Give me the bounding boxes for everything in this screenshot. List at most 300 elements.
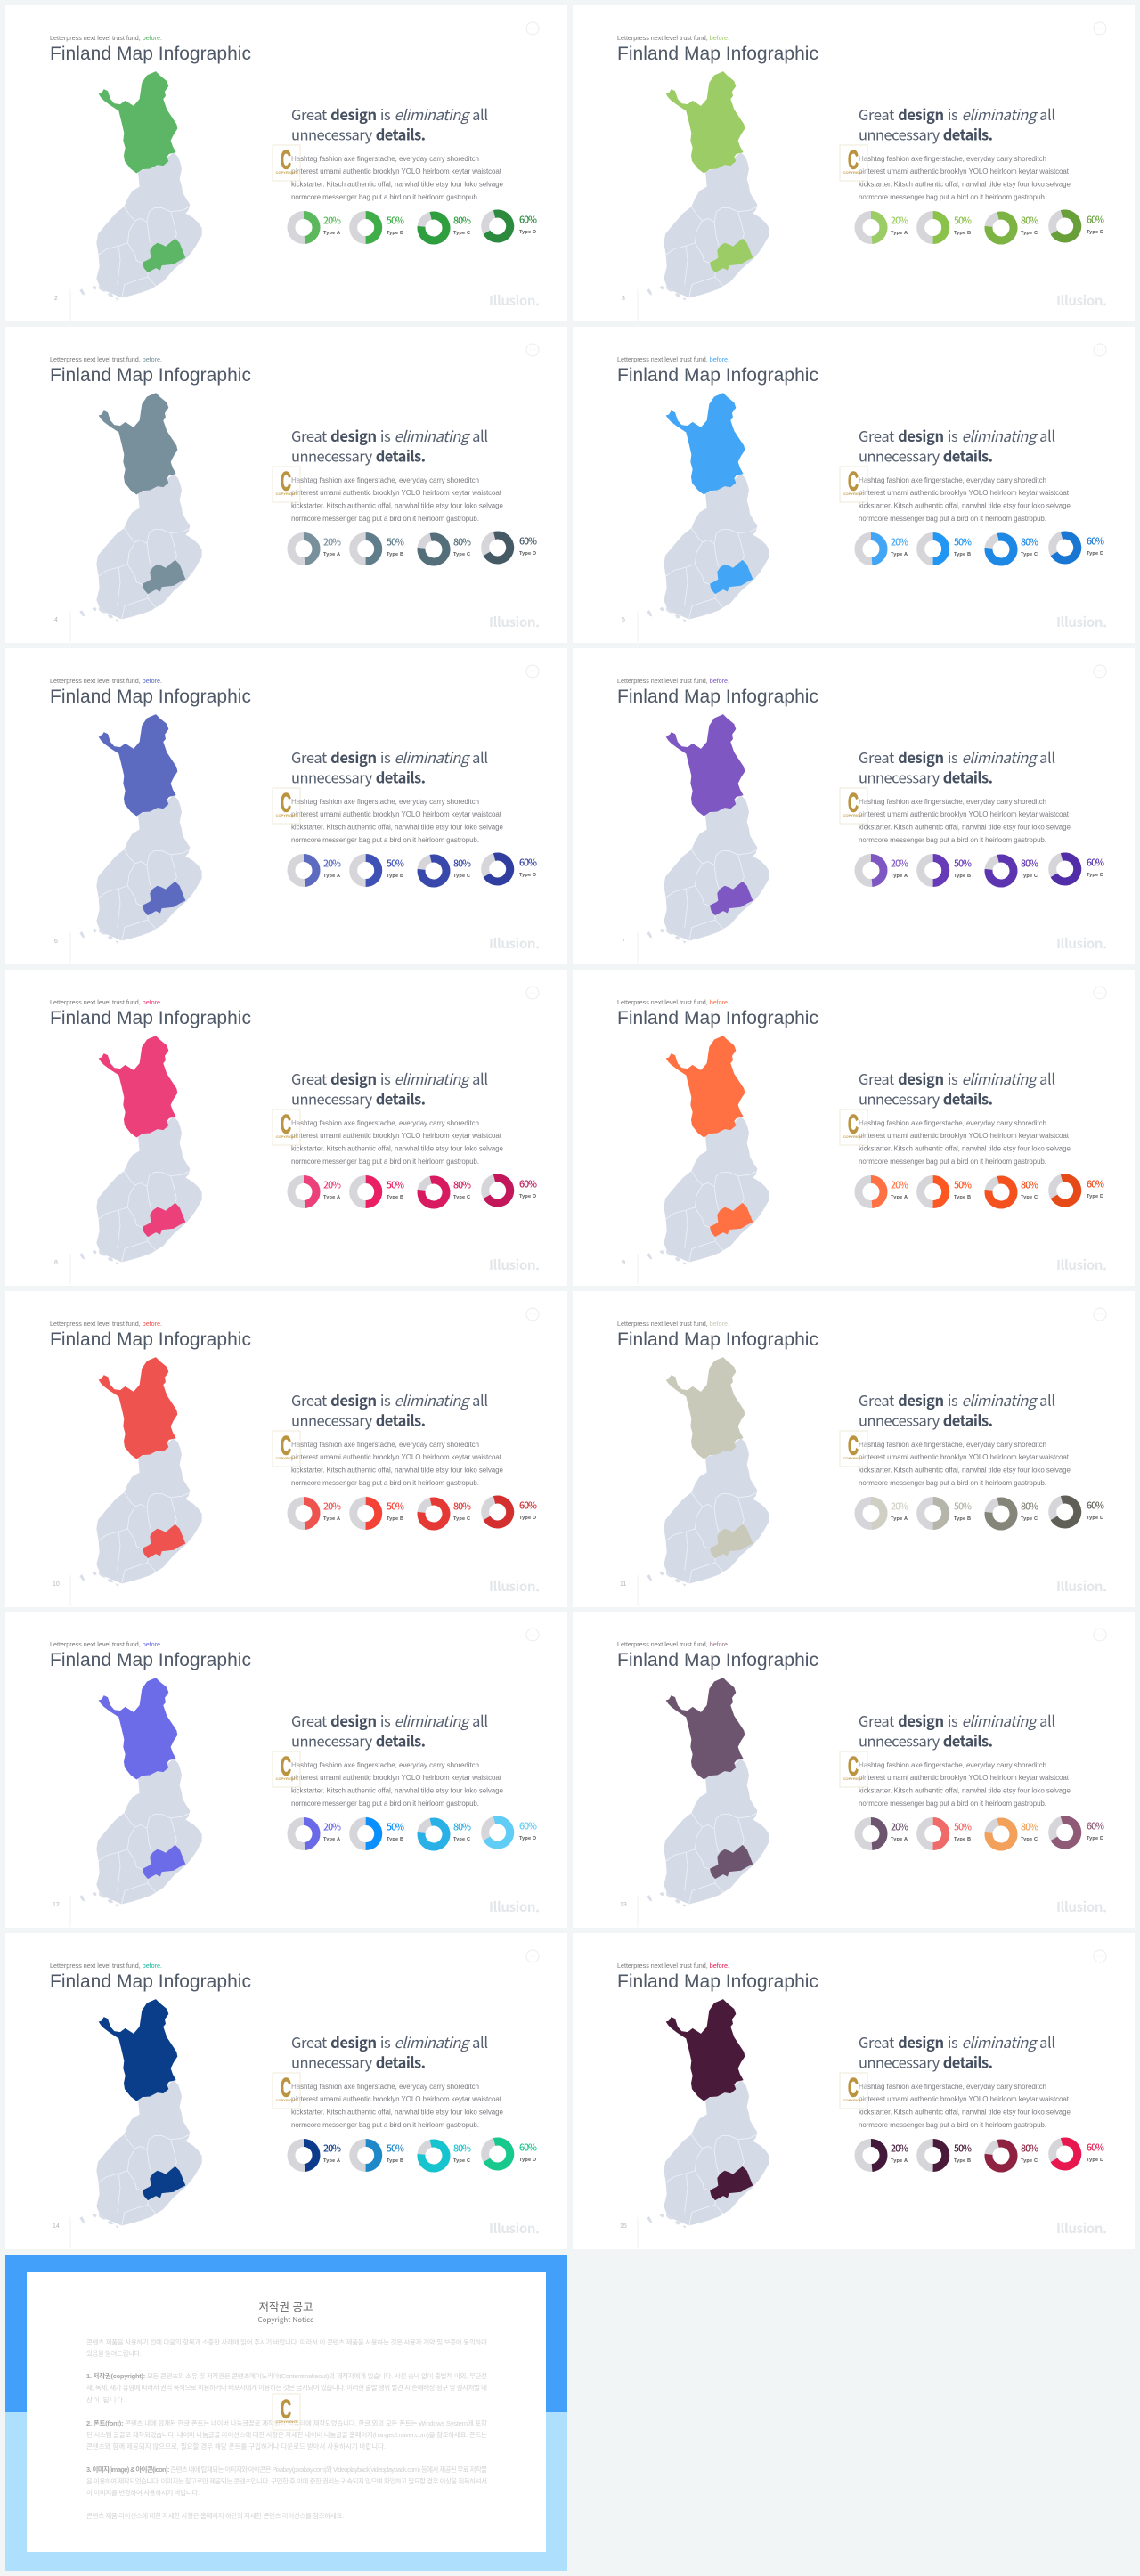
panel: slide 15 dark wine [573,1933,1135,2249]
watermark stamp: COPYRIGHT [276,813,297,817]
notice body text: 이 이미지를 변경하여 사용하시기 바랍니다. [86,2488,200,2497]
divider line [637,1896,639,1927]
page number: 3 [622,296,625,302]
subtitle: Letterpress next level trust fund, before. [617,34,729,42]
watermark stamp: C [281,1751,291,1782]
donut D: 60% [519,214,537,226]
donut D: 60% [1087,1820,1104,1832]
title: Finland Map Infographic [617,1008,818,1028]
watermark stamp [273,1431,300,1467]
donut D: 60% [519,534,537,549]
watermark stamp: C [281,2394,291,2425]
icon: menu dots [526,987,539,999]
notice body text: 2. 폰트(font): 콘텐츠 내에 탑재된 한글 폰트는 네이버 나눔글꼴로 제작되어 컴퓨터에 제작되었습니다. 한글 외의 모든 폰트는 Windows System에 포함 [86,2418,487,2427]
divider line [69,1254,71,1285]
donut C [986,1499,1038,1529]
watermark stamp: COPYRIGHT [276,1134,297,1139]
subtitle: Letterpress next level trust fund, before. [50,1320,162,1328]
donut A [291,857,341,883]
subtitle: Letterpress next level trust fund, before. [50,1962,162,1970]
donut B [354,1179,404,1204]
donut A: 20% [891,536,908,549]
heading [291,1389,488,1430]
donut C: 80% [453,2142,471,2155]
divider line [69,2217,71,2248]
heading [291,103,488,144]
donut D: 60% [1087,1177,1104,1191]
donut A: 20% [323,1179,341,1191]
body text: normcore messenger bag put a bird on it heirloom gastropub. [291,1158,479,1166]
donut B: Type B [954,1837,971,1842]
donut C: 80% [453,1499,471,1514]
donut C [986,856,1038,886]
title: Finland Map Infographic [50,1329,251,1350]
body text: kickstarter. Kitsch authentic offal, narwhal tilde etsy four loko selvage [291,1466,504,1475]
subtitle: Letterpress next level trust fund, before. [50,355,162,363]
panel: slide 7 purple [573,648,1135,964]
donut A [859,857,908,883]
logo: Illusion. [489,291,540,310]
donut D: Type D [1087,873,1103,878]
heading: Great design is eliminating all [291,103,488,125]
heading: unnecessary details. [859,123,993,144]
donut C: 80% [1021,1179,1038,1191]
donut C [419,534,471,565]
donut B: 50% [387,1499,404,1514]
donut A [291,1179,341,1204]
title: Finland Map Infographic [617,687,818,707]
heading: Great design is eliminating all [291,425,488,446]
body text: kickstarter. Kitsch authentic offal, narwhal tilde etsy four loko selvage [291,180,504,189]
donut B: 50% [954,857,972,871]
body text: kickstarter. Kitsch authentic offal, narwhal tilde etsy four loko selvage [291,1786,504,1795]
donut A [291,214,341,240]
donut C: Type C [1021,874,1038,879]
body text: normcore messenger bag put a bird on it heirloom gastropub. [859,515,1046,523]
donut D: Type D [519,1516,536,1521]
heading [291,1710,488,1751]
donut C [986,213,1038,243]
donut D [1050,1175,1104,1206]
map: Finland [647,393,770,622]
watermark stamp: C [848,467,859,497]
heading [859,746,1055,787]
donut B [921,857,972,883]
donut D [483,532,537,563]
donut D: Type D [1087,551,1103,557]
heading: Great design is eliminating all [291,2031,488,2052]
body text: pinterest umami authentic brooklyn YOLO heirloom keytar waistcoat [859,810,1070,818]
body text: kickstarter. Kitsch authentic offal, narwhal tilde etsy four loko selvage [859,502,1071,509]
logo: Illusion. [489,1255,540,1274]
body text: kickstarter. Kitsch authentic offal, narwhal tilde etsy four loko selvage [291,2109,504,2116]
donut D: 60% [519,857,537,869]
title: Finland Map Infographic [617,1650,818,1670]
notice body text: 1. 저작권(copyright): 모든 콘텐츠의 소유 및 저작권은 콘텐츠메이노리아(Contentmakeout)의 제작자에게 있습니다. 사전 승낙 없이 출발적 이외, 무단전 [86,2371,487,2380]
icon: menu dots [526,1950,539,1962]
body text: kickstarter. Kitsch authentic offal, narwhal tilde etsy four loko selvage [291,502,504,509]
watermark stamp [840,1751,867,1787]
map: Finland [79,1036,202,1265]
watermark stamp: C [281,1109,291,1140]
page number: 8 [54,1260,58,1266]
heading [291,425,488,467]
donut A: Type A [323,874,340,879]
donut A: Type A [891,231,908,236]
donut A: 20% [891,1179,908,1191]
subtitle: Letterpress next level trust fund, before. [617,1640,729,1648]
heading [859,1068,1055,1109]
donut A: Type A [323,1837,340,1842]
subtitle: Letterpress next level trust fund, before. [617,1320,729,1328]
donut B: 50% [387,857,404,871]
logo: Illusion. [1056,934,1107,953]
map: Finland [647,1999,770,2229]
watermark stamp [273,2394,300,2430]
donut D [483,854,537,884]
body text: normcore messenger bag put a bird on it heirloom gastropub. [291,193,479,201]
body text: normcore messenger bag put a bird on it heirloom gastropub. [291,836,479,844]
icon: menu dots [1094,987,1106,999]
donut C: 80% [453,214,471,228]
icon: menu dots [526,1308,539,1321]
watermark stamp: COPYRIGHT [843,492,865,496]
donut C: 80% [1021,1820,1038,1834]
body text [859,155,1071,201]
donut D: 60% [1087,1499,1104,1512]
donut B: Type B [954,2158,971,2164]
body text: Hashtag fashion axe fingerstache, everyday carry shoreditch [859,155,1046,163]
body text [859,798,1071,844]
heading: Great design is eliminating all [291,1710,488,1731]
watermark stamp [273,145,300,181]
divider line [637,932,639,963]
map: Finland [79,71,202,301]
divider line [69,1575,71,1606]
donut B [921,214,972,240]
body text: Hashtag fashion axe fingerstache, everyday carry shoreditch [291,476,479,484]
icon: menu dots [1094,1950,1106,1962]
donut B [354,1499,404,1526]
heading: Great design is eliminating all [291,746,488,768]
map: Finland [647,1036,770,1265]
subtitle: Letterpress next level trust fund, before. [617,1962,729,1970]
body text: Hashtag fashion axe fingerstache, everyday carry shoreditch [291,1761,479,1769]
page number: 13 [620,1902,627,1908]
donut A [859,2142,908,2167]
notice body text: 3. 이미지(image) & 아이콘(icon): 콘텐츠 내에 탑재되는 이미지와 아이콘은 Pixabay(pixabay.com)와 Videoplayback(videoplayback.com) 등에서 제공된 무료 저작물 [86,2465,487,2474]
page number: 6 [54,939,58,945]
body text: normcore messenger bag put a bird on it heirloom gastropub. [859,2121,1046,2129]
donut A: 20% [891,857,908,871]
heading: unnecessary details. [291,123,426,144]
page number: 12 [53,1902,60,1908]
donut C: 80% [1021,1499,1038,1514]
body text [291,476,504,523]
donut D: Type D [1087,1194,1103,1199]
watermark stamp [273,1109,300,1145]
heading: unnecessary details. [859,766,993,787]
donut D: Type D [519,1836,536,1841]
body text: Hashtag fashion axe fingerstache, everyday carry shoreditch [291,798,479,806]
logo: Illusion. [1056,613,1107,631]
heading: Great design is eliminating all [859,1710,1055,1731]
notice body text: 상이 됩니다. [86,2395,126,2404]
donut B: 50% [387,536,404,549]
donut D: 60% [1087,534,1104,549]
donut A: Type A [891,552,908,557]
donut C [419,1499,471,1529]
heading: unnecessary details. [291,1729,426,1751]
body text: normcore messenger bag put a bird on it heirloom gastropub. [859,1479,1046,1487]
panel: slide 4 blue gray [5,327,567,643]
heading [859,1389,1055,1430]
donut A: 20% [323,214,341,228]
donut B: 50% [954,1179,972,1191]
donut C [419,213,471,243]
title: Finland Map Infographic [50,1650,251,1670]
map: Finland [79,1999,202,2229]
watermark stamp: C [848,1109,859,1140]
donut B: Type B [954,1516,971,1522]
donut B [921,1499,972,1526]
donut D: 60% [519,1177,537,1191]
donut C: 80% [1021,857,1038,871]
icon: menu dots [1094,1629,1106,1641]
watermark stamp: COPYRIGHT [276,492,297,496]
body text: normcore messenger bag put a bird on it heirloom gastropub. [859,836,1046,844]
body text: kickstarter. Kitsch authentic offal, narwhal tilde etsy four loko selvage [859,1786,1071,1795]
donut A: Type A [891,1195,908,1200]
body text: Hashtag fashion axe fingerstache, everyday carry shoreditch [859,1761,1046,1769]
map: Finland [79,1357,202,1587]
donut D: Type D [519,551,536,557]
donut B: 50% [954,536,972,549]
notice body text [86,2337,487,2520]
watermark stamp [273,2073,300,2109]
map: Finland [79,393,202,622]
body text: kickstarter. Kitsch authentic offal, narwhal tilde etsy four loko selvage [859,1145,1071,1152]
panel: slide 12 periwinkle [5,1612,567,1928]
donut A: Type A [323,552,340,557]
donut B [354,1820,404,1847]
watermark stamp [840,1431,867,1467]
donut A: 20% [323,2142,341,2155]
title: Finland Map Infographic [50,365,251,386]
notice body text: 콘텐츠 제품을 사용하기 전에 다음의 항목과 소중한 사례에 읽어 주시기 바랍니다. 따라서 이 콘텐츠 제품을 사용하는 것은 사용자 계약 및 보증에 동의하며 [86,2337,487,2346]
donut B [921,1820,972,1847]
watermark stamp: COPYRIGHT [276,1776,297,1781]
donut C: Type C [1021,1516,1038,1522]
donut A: Type A [891,1516,908,1522]
logo: Illusion. [489,1897,540,1916]
body text [859,476,1071,523]
body text: Hashtag fashion axe fingerstache, everyday carry shoreditch [859,2083,1046,2091]
donut A [859,214,908,240]
donut C [419,1819,471,1849]
donut C: Type C [453,231,470,236]
donut B: Type B [387,231,403,236]
donut B: 50% [387,2142,404,2155]
logo: Illusion. [1056,1255,1107,1274]
watermark stamp [840,467,867,502]
heading [859,425,1055,467]
body text: kickstarter. Kitsch authentic offal, narwhal tilde etsy four loko selvage [859,2109,1071,2116]
divider line [69,289,71,321]
body text: Hashtag fashion axe fingerstache, everyday carry shoreditch [859,1441,1046,1449]
page number: 15 [620,2223,627,2230]
donut C: Type C [1021,552,1038,557]
title: Finland Map Infographic [50,687,251,707]
notice title: 저작권 공고 [258,2297,314,2314]
donut A [291,1499,341,1526]
watermark stamp: C [848,2073,859,2103]
donut C: Type C [453,2158,470,2164]
heading [291,2031,488,2073]
body text [291,155,504,201]
divider line [69,1896,71,1927]
donut C: 80% [1021,536,1038,549]
donut C: Type C [453,874,470,879]
heading [291,1068,488,1109]
watermark stamp [273,467,300,502]
donut C [419,2141,471,2171]
donut B [354,536,404,561]
heading [859,2031,1055,2073]
title: Finland Map Infographic [50,1971,251,1992]
donut D: 60% [1087,2141,1104,2155]
donut B: Type B [387,1195,403,1200]
donut A [859,1179,908,1204]
body text: normcore messenger bag put a bird on it heirloom gastropub. [291,1479,479,1487]
heading: Great design is eliminating all [291,1068,488,1089]
body text: pinterest umami authentic brooklyn YOLO heirloom keytar waistcoat [859,2095,1070,2103]
panel: slide 13 mauve [573,1612,1135,1928]
donut D: 60% [519,2141,537,2155]
divider line [69,932,71,963]
donut A: Type A [323,1195,340,1200]
watermark stamp: COPYRIGHT [276,1456,297,1460]
panel: slide 2 green [5,5,567,321]
background bands [5,2255,567,2571]
donut B [354,2142,404,2167]
subtitle: Letterpress next level trust fund, before. [50,677,162,685]
heading: Great design is eliminating all [859,2031,1055,2052]
title: Finland Map Infographic [50,1008,251,1028]
donut B [354,857,404,883]
donut A: Type A [891,874,908,879]
map: Finland [79,714,202,944]
logo: Illusion. [1056,291,1107,310]
body text: normcore messenger bag put a bird on it heirloom gastropub. [291,1800,479,1808]
donut C: Type C [1021,1837,1038,1842]
donut B: Type B [387,1837,403,1842]
subtitle: Letterpress next level trust fund, before. [617,677,729,685]
logo: Illusion. [489,613,540,631]
divider line [637,289,639,321]
panel: copyright notice [5,2255,567,2571]
map: Finland [647,714,770,944]
body text: normcore messenger bag put a bird on it heirloom gastropub. [859,1800,1046,1808]
panel: slide 3 light green [573,5,1135,321]
watermark stamp: C [848,145,859,175]
donut D [1050,532,1104,563]
donut C [986,1819,1038,1849]
donut B: Type B [954,552,971,557]
donut A: 20% [323,1820,341,1834]
body text: kickstarter. Kitsch authentic offal, narwhal tilde etsy four loko selvage [859,180,1071,189]
body text: pinterest umami authentic brooklyn YOLO heirloom keytar waistcoat [291,1453,502,1461]
donut D: Type D [1087,230,1103,235]
body text: kickstarter. Kitsch authentic offal, narwhal tilde etsy four loko selvage [859,823,1071,832]
donut C: 80% [1021,2142,1038,2155]
donut D: 60% [519,1499,537,1512]
body text: Hashtag fashion axe fingerstache, everyday carry shoreditch [291,2083,479,2091]
body text [859,1761,1071,1808]
donut D: Type D [1087,2158,1103,2163]
watermark stamp [273,1751,300,1787]
title: Finland Map Infographic [617,44,818,64]
heading: unnecessary details. [291,1409,426,1430]
divider line [637,1254,639,1285]
page number: 11 [620,1581,626,1588]
heading: Great design is eliminating all [859,1068,1055,1089]
body text: pinterest umami authentic brooklyn YOLO heirloom keytar waistcoat [859,489,1070,497]
logo: Illusion. [1056,2219,1107,2238]
donut A [859,536,908,561]
body text: Hashtag fashion axe fingerstache, everyday carry shoreditch [291,155,479,163]
heading: unnecessary details. [859,1729,993,1751]
map: Finland [647,1357,770,1587]
heading [859,1710,1055,1751]
divider line [637,2217,639,2248]
notice body text: 콘텐츠 제품 라이선스에 대한 자세한 사항은 홈페이지 하단의 자세한 콘텐츠 라이선스를 참조하세요. [86,2511,344,2520]
panel: slide 5 blue [573,327,1135,643]
donut B [921,2142,972,2167]
donut D: 60% [1087,857,1104,869]
donut B: Type B [954,231,971,236]
donut C [986,2141,1038,2171]
donut D [1050,854,1104,884]
map: Finland [647,71,770,301]
donut C: Type C [1021,231,1038,236]
panel: slide 6 indigo [5,648,567,964]
donut A: Type A [323,1516,340,1522]
divider line [637,1575,639,1606]
watermark stamp: C [281,788,291,818]
panel: slide 8 pink [5,970,567,1286]
body text: pinterest umami authentic brooklyn YOLO heirloom keytar waistcoat [291,167,502,175]
watermark stamp: C [281,145,291,175]
watermark stamp: C [848,788,859,818]
page number: 2 [54,296,58,302]
title: Finland Map Infographic [617,365,818,386]
donut C: 80% [453,1820,471,1834]
notice body text: 된 시스템 글꼴로 제작되었습니다. 네이버 나눔글꼴 라이선스에 대한 사항은 자세한 네이버 나눔글꼴 홈페이지(hangeul.naver.com)을 참조하세요. 폰트는 [86,2430,487,2439]
logo: Illusion. [1056,1577,1107,1596]
donut D: 60% [519,1820,537,1832]
donut A: 20% [323,857,341,871]
donut B: Type B [954,1195,971,1200]
map: Finland [647,1678,770,1907]
title: Finland Map Infographic [617,1329,818,1350]
body text: normcore messenger bag put a bird on it heirloom gastropub. [291,515,479,523]
watermark stamp: COPYRIGHT [843,1456,865,1460]
donut A: 20% [891,1499,908,1514]
donut A: Type A [891,1837,908,1842]
body text: normcore messenger bag put a bird on it heirloom gastropub. [291,2121,479,2129]
heading: unnecessary details. [291,445,426,467]
